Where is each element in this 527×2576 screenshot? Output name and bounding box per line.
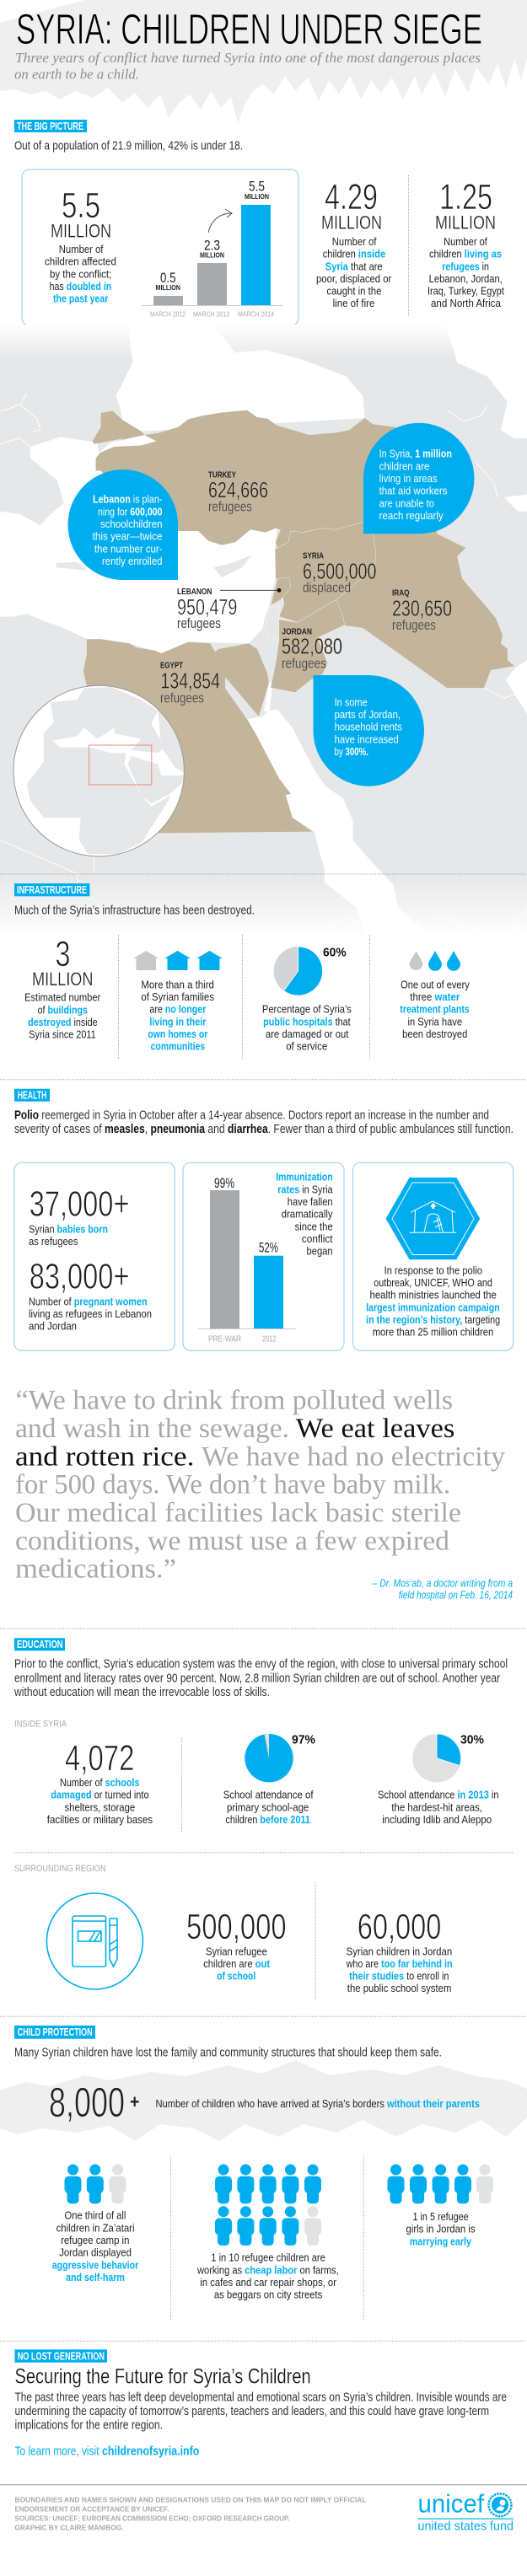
- text: immunization: since the: [295, 1220, 333, 1232]
- callout: Jordan rents: household rents: [335, 721, 402, 733]
- bar chart: children affected: 0.5: [160, 270, 175, 286]
- stat: 4.29 million inside Syria: 4.29: [325, 177, 378, 217]
- bar chart: children affected: MILLION: [200, 251, 224, 260]
- bar chart: immunization rates: 2012: [262, 1335, 277, 1344]
- quote: medications.”: [15, 1554, 176, 1585]
- text: Za'atari: aggressive behavior: [52, 2258, 138, 2271]
- stat: 4.29 million inside Syria: children inside: [323, 248, 385, 260]
- quote: and rotten rice.: [15, 1441, 194, 1472]
- background texture: top grunge band: [0, 0, 527, 123]
- bar chart: children affected: MILLION: [245, 192, 269, 201]
- text: Za'atari: children in Za’atari: [56, 2221, 135, 2234]
- section tag: CHILD PROTECTION: [18, 2026, 93, 2038]
- stat: 1.25 million refugees: 1.25: [439, 177, 492, 217]
- description: by the conflict;: [50, 267, 111, 280]
- country: Israel: [266, 605, 279, 641]
- stat: 500,000: Syrian refugee: [206, 1945, 267, 1957]
- link line: [15, 2445, 199, 2459]
- stat: 4,072 schools: Number of schools: [60, 1776, 140, 1789]
- text: polio campaign: largest immunization campaign: [366, 1301, 500, 1314]
- map label: Syria: displaced: [303, 580, 351, 596]
- stat: 37,000+: as refugees: [29, 1235, 78, 1248]
- text: families displaced: communities: [151, 1040, 205, 1053]
- stat: 3 million buildings: destroyed inside: [28, 1016, 98, 1028]
- bar chart: children affected: MARCH 2014: [238, 310, 274, 318]
- map label: Jordan: 582,080: [282, 634, 342, 659]
- text: Za'atari: Jordan displayed: [59, 2246, 132, 2259]
- stat: 60,000: their studies to enroll in: [349, 1970, 449, 1983]
- description: has doubled in: [50, 280, 111, 292]
- text: families displaced: own homes or: [148, 1028, 207, 1040]
- footer notes: BOUNDARIES AND NAMES SHOWN AND DESIGNATIONS USED ON THIS MAP DO NOT IMPLY OFFICIAL: [15, 2495, 366, 2504]
- text: polio campaign: more than 25 million children: [373, 1326, 493, 1339]
- bar chart: children affected: MARCH 2012: [150, 310, 186, 318]
- pie chart: attendance 97%: 97%: [292, 1732, 315, 1747]
- section tag: [14, 883, 89, 896]
- section tag: [14, 1089, 50, 1102]
- background texture: lower grunge band: [0, 2060, 527, 2141]
- stat: 60,000: 60,000: [358, 1907, 441, 1947]
- text: attendance in 2013: including Idlib and Aleppo: [382, 1813, 492, 1826]
- callout: Lebanon schoolchildren: rently enrolled: [102, 555, 162, 567]
- stat: 8,000+: 8,000: [49, 2080, 125, 2126]
- callout: Syria children in unreachable areas: [363, 423, 474, 534]
- text: attendance before 2011: primary school-age: [227, 1801, 309, 1813]
- stat: 500,000: [186, 1907, 287, 1983]
- map label: Lebanon: [177, 588, 281, 631]
- text: cheap labor: working as cheap labor on farms,: [196, 2263, 339, 2276]
- panel: 5.5 million card: [22, 169, 298, 325]
- text: marrying early: 1 in 5 refugee: [413, 2210, 469, 2223]
- text: hospitals: of service: [286, 1040, 327, 1053]
- section: education: [13, 1638, 514, 2000]
- stat: 60,000: the public school system: [347, 1982, 451, 1994]
- icon: hexagon tent: [386, 1178, 480, 1259]
- map label: Syria: SYRIA: [303, 552, 324, 561]
- quote: “We have to drink from polluted wells: [16, 1386, 453, 1416]
- stat: 37,000+: Syrian babies born: [29, 1223, 108, 1236]
- bar chart: children affected: 2.3: [204, 238, 220, 254]
- stat: 5.5 million: MILLION: [51, 221, 111, 242]
- footer notes: [15, 2495, 366, 2532]
- callout: Syria children in unreachable areas: reach regularly: [379, 509, 444, 522]
- stat: 4,072 schools: shelters, storage: [64, 1801, 135, 1813]
- stat: 83,000+: [29, 1256, 152, 1333]
- stat: 60,000: who are too far behind in: [346, 1957, 453, 1970]
- bar chart: immunization rates: 99%: [214, 1175, 234, 1191]
- text: marrying early: girls in Jordan is: [406, 2223, 476, 2235]
- text: attendance before 2011: School attendance of: [223, 1789, 314, 1801]
- text: attendance in 2013: the hardest-hit areas,: [391, 1801, 482, 1813]
- map label: Turkey: [208, 471, 268, 515]
- stat: 3 million buildings: Estimated number: [24, 991, 101, 1004]
- text: families displaced: living in their: [149, 1015, 206, 1028]
- icon: people one in five: [388, 2165, 493, 2203]
- arrow: growth: [208, 209, 232, 233]
- subtitle: Three years of conflict have turned Syria into one of the most dangerous places: [15, 50, 481, 66]
- quote: conditions, we must use a few expired: [15, 1526, 449, 1556]
- panel: immunization bar chart: [183, 1162, 344, 1350]
- section tag: [15, 2349, 107, 2363]
- map label: Turkey: TURKEY: [208, 471, 236, 480]
- stat: 60,000: Syrian children in Jordan: [347, 1945, 452, 1957]
- text: polio campaign: In response to the polio: [384, 1264, 482, 1277]
- paragraph: [15, 2391, 507, 2433]
- country: Syria: [275, 522, 376, 622]
- text: Za'atari: [52, 2209, 138, 2284]
- text: polio campaign: health ministries launched the: [369, 1289, 497, 1301]
- footer notes: GRAPHIC BY CLAIRE MANIBOG.: [15, 2524, 123, 2532]
- section tag: [14, 120, 87, 132]
- text: families displaced: [141, 978, 214, 1053]
- section tag: INFRASTRUCTURE: [17, 884, 87, 896]
- pie chart: attendance 30%: [412, 1732, 484, 1782]
- stat: 1.25 million refugees: Iraq, Turkey, Egypt: [428, 285, 504, 298]
- subtitle: on earth to be a child.: [14, 67, 139, 83]
- text: cheap labor: as beggars on city streets: [214, 2289, 323, 2301]
- text: attendance in 2013: [378, 1789, 499, 1826]
- intro text: Much of the Syria’s infrastructure has been destroyed.: [14, 904, 255, 917]
- callout: Lebanon schoolchildren: schoolchildren: [100, 518, 162, 530]
- stat: 37,000+: 37,000+: [30, 1184, 130, 1225]
- text: cheap labor: [196, 2251, 339, 2301]
- text: marrying early: [406, 2210, 476, 2247]
- text: attendance before 2011: children before 2011: [226, 1813, 310, 1826]
- callout: Syria children in unreachable areas: In Syria, 1 million: [379, 448, 452, 460]
- text: Za'atari: refugee camp in: [61, 2234, 129, 2246]
- text: water plants: in Syria have: [408, 1015, 462, 1028]
- icon: book and pencil: [46, 1893, 143, 1989]
- map label: Syria: [303, 552, 376, 596]
- bar chart: children affected: [142, 179, 282, 318]
- text: hospitals: are damaged or out: [266, 1028, 349, 1040]
- bar chart: immunization rates: [198, 1175, 296, 1344]
- icon: people one in ten: [215, 2165, 321, 2246]
- text: water plants: One out of every: [401, 978, 470, 990]
- map of the region: [0, 323, 527, 951]
- pie chart: hospitals 60%: [274, 945, 347, 996]
- bar chart: children affected: MILLION: [155, 283, 180, 292]
- stat: 4,072 schools: [47, 1738, 153, 1826]
- map label: Turkey: 624,666: [208, 477, 268, 502]
- map label: Egypt: [160, 662, 220, 706]
- stat: 4.29 million inside Syria: line of fire: [333, 297, 374, 309]
- callout: Jordan rents: In some: [335, 695, 368, 708]
- footer notes: ENDORSEMENT OR ACCEPTANCE BY UNICEF.: [15, 2504, 169, 2513]
- map label: Lebanon: LEBANON: [177, 588, 212, 597]
- stat: 8,000+: +: [130, 2091, 139, 2112]
- quote: We have had no electricity: [202, 1441, 506, 1472]
- icon: people one third: [64, 2165, 126, 2203]
- stat: 3 million buildings: MILLION: [32, 969, 93, 990]
- text: families displaced: are no longer: [149, 1003, 206, 1016]
- map label: Iraq: [392, 589, 452, 633]
- panel: refugee births: [14, 1162, 175, 1350]
- intro text: [13, 1658, 508, 1699]
- section: no lost generation: [15, 2349, 507, 2459]
- text: families displaced: More than a third: [141, 978, 214, 990]
- quote attribution: [372, 1577, 513, 1602]
- section tag: NO LOST GENERATION: [18, 2350, 105, 2362]
- text: hospitals: [262, 1003, 352, 1053]
- text: immunization: Immunization: [276, 1171, 333, 1183]
- intro text: without education will mean the irrevocable loss of skills.: [13, 1686, 270, 1699]
- quote: Our medical facilities lack basic sterile: [15, 1498, 461, 1528]
- map label: Syria: 6,500,000: [303, 559, 376, 584]
- text: hospitals: Percentage of Syria’s: [262, 1003, 352, 1016]
- intro text: [14, 1108, 514, 1136]
- map label: Lebanon: refugees: [177, 615, 221, 631]
- stat: 5.5 million: 5.5: [62, 185, 100, 226]
- stat: 500,000: 500,000: [186, 1907, 287, 1947]
- stat: 8,000+: Number of children who have arrived at Syria’s borders without their parents: [155, 2097, 480, 2110]
- country: Turkey: [93, 411, 437, 548]
- map label: Jordan: refugees: [282, 655, 326, 671]
- stat: 3 million buildings: of buildings: [38, 1003, 88, 1016]
- link line: To learn more, visit: [15, 2445, 99, 2459]
- stat: 4.29 million inside Syria: Syria that are: [325, 260, 383, 272]
- stat: 5.5 million: [51, 185, 111, 242]
- icon: unicef emblem: [489, 2493, 511, 2516]
- stat: 1.25 million refugees: children living as: [429, 248, 502, 260]
- panel: polio campaign: [352, 1162, 514, 1350]
- stat: 3 million buildings: Syria since 2011: [29, 1028, 96, 1041]
- text: hospitals: public hospitals that: [263, 1015, 351, 1028]
- map label: Egypt: EGYPT: [160, 662, 183, 671]
- callout: Lebanon schoolchildren: [68, 470, 178, 580]
- callout: Jordan rents: by 300%.: [335, 745, 368, 758]
- callout: Jordan rents: have increased: [335, 733, 399, 745]
- icon: houses: [133, 951, 223, 970]
- footer notes: SOURCES: UNICEF; EUROPEAN COMMISSION ECHO; OXFORD RESEARCH GROUP.: [15, 2514, 290, 2522]
- map label: Lebanon: 950,479: [177, 594, 237, 620]
- quote: for 500 days. We don’t have baby milk.: [15, 1470, 450, 1500]
- intro text: Out of a population of 21.9 million, 42% is under 18.: [14, 140, 243, 153]
- callout: Syria children in unreachable areas: that aid workers: [379, 485, 448, 497]
- section: child protection: [14, 2026, 493, 2321]
- stat: 4,072 schools: damaged or turned into: [51, 1789, 149, 1801]
- bar chart: children affected: MARCH 2013: [193, 310, 229, 318]
- stat: 1.25 million refugees: refugees in: [442, 260, 489, 272]
- map label: Turkey: refugees: [208, 499, 252, 515]
- callout: Lebanon schoolchildren: the number cur-: [94, 542, 162, 555]
- stat: 3 million buildings: 3: [56, 934, 71, 974]
- subheading: surrounding region: SURROUNDING REGION: [14, 1864, 106, 1874]
- description: [45, 243, 116, 305]
- subheading: inside Syria: INSIDE SYRIA: [14, 1719, 67, 1729]
- stat: 4,072 schools: facilties or military bases: [47, 1813, 153, 1826]
- stat: 4,072 schools: 4,072: [65, 1738, 134, 1779]
- pie chart: attendance 30%: 30%: [460, 1732, 484, 1747]
- section: health: [14, 1089, 514, 1350]
- stat: 4.29 million inside Syria: Number of: [332, 235, 377, 248]
- section: infrastructure: [14, 883, 470, 1060]
- text: immunization: conflict: [302, 1232, 333, 1245]
- unicef logo: unicef: [418, 2489, 484, 2519]
- text: Za'atari: One third of all: [64, 2209, 126, 2222]
- text: polio campaign: [366, 1264, 500, 1339]
- map label: Egypt: 134,854: [160, 668, 220, 694]
- locator globe: [13, 685, 188, 856]
- text: Za'atari: and self-harm: [66, 2271, 125, 2284]
- callout: Lebanon schoolchildren: this year—twice: [93, 530, 162, 543]
- unicef logo: [418, 2489, 514, 2534]
- callout: Lebanon schoolchildren: Lebanon is plan-: [93, 493, 162, 506]
- text: attendance before 2011: [223, 1789, 314, 1826]
- text: water plants: three water: [410, 990, 460, 1003]
- text: immunization: began: [307, 1245, 333, 1258]
- text: families displaced: of Syrian families: [141, 990, 214, 1003]
- country: Egypt: [83, 639, 313, 833]
- bar chart: immunization rates: 52%: [259, 1240, 278, 1256]
- stat: 1.25 million refugees: Lebanon, Jordan,: [429, 272, 503, 285]
- callout: Syria children in unreachable areas: living in areas: [379, 472, 438, 485]
- stat: 500,000: of school: [217, 1970, 255, 1983]
- map label: Jordan: [282, 628, 342, 671]
- section: the big picture: [14, 120, 504, 325]
- stat: 83,000+: and Jordan: [29, 1320, 77, 1333]
- map label: Iraq: IRAQ: [392, 589, 410, 598]
- stat: 1.25 million refugees: [428, 177, 504, 309]
- text: water plants: [400, 978, 470, 1040]
- stat: 4.29 million inside Syria: [316, 177, 392, 309]
- text: cheap labor: in cafes and car repair shops, or: [200, 2276, 337, 2289]
- stat: 1.25 million refugees: Number of: [444, 235, 487, 248]
- map label: Egypt: refugees: [160, 690, 204, 706]
- stat: 60,000: [346, 1907, 453, 1994]
- section tag: HEALTH: [18, 1089, 46, 1101]
- description: Number of: [59, 243, 104, 255]
- section tag: EDUCATION: [17, 1639, 62, 1650]
- heading: Securing the Future for Syria’s Children: [15, 2365, 311, 2389]
- quote: and wash in the sewage.: [15, 1414, 289, 1444]
- description: children affected: [45, 255, 116, 268]
- section tag: [14, 2026, 95, 2039]
- stat: 83,000+: 83,000+: [30, 1256, 130, 1296]
- unicef logo: united states fund: [418, 2520, 514, 2534]
- text: water plants: been destroyed: [402, 1028, 467, 1040]
- link line: childrenofsyria.info: [102, 2445, 199, 2459]
- callout: Jordan rents: [314, 675, 424, 786]
- callout: Syria children in unreachable areas: are unable to: [379, 496, 434, 509]
- stat: 83,000+: living as refugees in Lebanon: [29, 1307, 152, 1320]
- stat: 4.29 million inside Syria: caught in the: [326, 285, 381, 298]
- subtitle: [14, 50, 481, 83]
- text: attendance in 2013: School attendance in 2013 in: [378, 1789, 499, 1801]
- text: immunization: have fallen: [288, 1195, 333, 1208]
- locator rectangle: [89, 745, 152, 785]
- text: polio campaign: in the region’s history, targeting: [366, 1313, 500, 1326]
- stat: 4.29 million inside Syria: MILLION: [321, 212, 382, 233]
- pie chart: hospitals 60%: 60%: [323, 945, 347, 959]
- stat: 1.25 million refugees: MILLION: [435, 212, 496, 233]
- text: immunization: dramatically: [282, 1208, 333, 1221]
- pie chart: attendance 97%: [245, 1732, 315, 1782]
- text: polio campaign: outbreak, UNICEF, WHO and: [374, 1276, 492, 1289]
- text: marrying early: marrying early: [410, 2235, 472, 2247]
- country: Iraq: [336, 534, 514, 688]
- bar chart: children affected: 5.5: [249, 179, 265, 195]
- icon: water drops: [410, 951, 460, 971]
- stat: 3 million buildings: [24, 934, 101, 1041]
- stat: 500,000: children are out: [203, 1957, 271, 1970]
- stat: 8,000+: [49, 2080, 480, 2126]
- callout: Lebanon schoolchildren: ning for 600,000: [98, 505, 162, 518]
- bar chart: immunization rates: PRE-WAR: [208, 1335, 241, 1344]
- text: immunization: [276, 1171, 333, 1258]
- map label: Iraq: 230,650: [392, 596, 452, 621]
- text: immunization: rates in Syria: [277, 1183, 333, 1195]
- text: cheap labor: 1 in 10 refugee children are: [211, 2251, 325, 2264]
- country: Lebanon: [271, 577, 291, 605]
- map label: Iraq: refugees: [392, 617, 436, 633]
- callout: Syria children in unreachable areas: children are: [379, 459, 429, 472]
- section tag: THE BIG PICTURE: [17, 121, 83, 132]
- callout: Jordan rents: parts of Jordan,: [335, 708, 401, 721]
- stat: 83,000+: Number of pregnant women: [29, 1295, 148, 1307]
- stat: 37,000+: [29, 1184, 130, 1248]
- paragraph: implications for the entire region.: [15, 2419, 163, 2433]
- map label: Jordan: JORDAN: [282, 628, 312, 637]
- quote: [15, 1386, 506, 1585]
- text: water plants: treatment plants: [400, 1003, 470, 1016]
- country: Jordan: [271, 600, 345, 693]
- quote: We eat leaves: [296, 1414, 454, 1444]
- stat: 4.29 million inside Syria: poor, displaced or: [316, 272, 392, 285]
- description: the past year: [53, 292, 108, 305]
- intro text: Many Syrian children have lost the family and community structures that should keep them safe.: [14, 2046, 442, 2059]
- stat: 1.25 million refugees: and North Africa: [431, 297, 502, 309]
